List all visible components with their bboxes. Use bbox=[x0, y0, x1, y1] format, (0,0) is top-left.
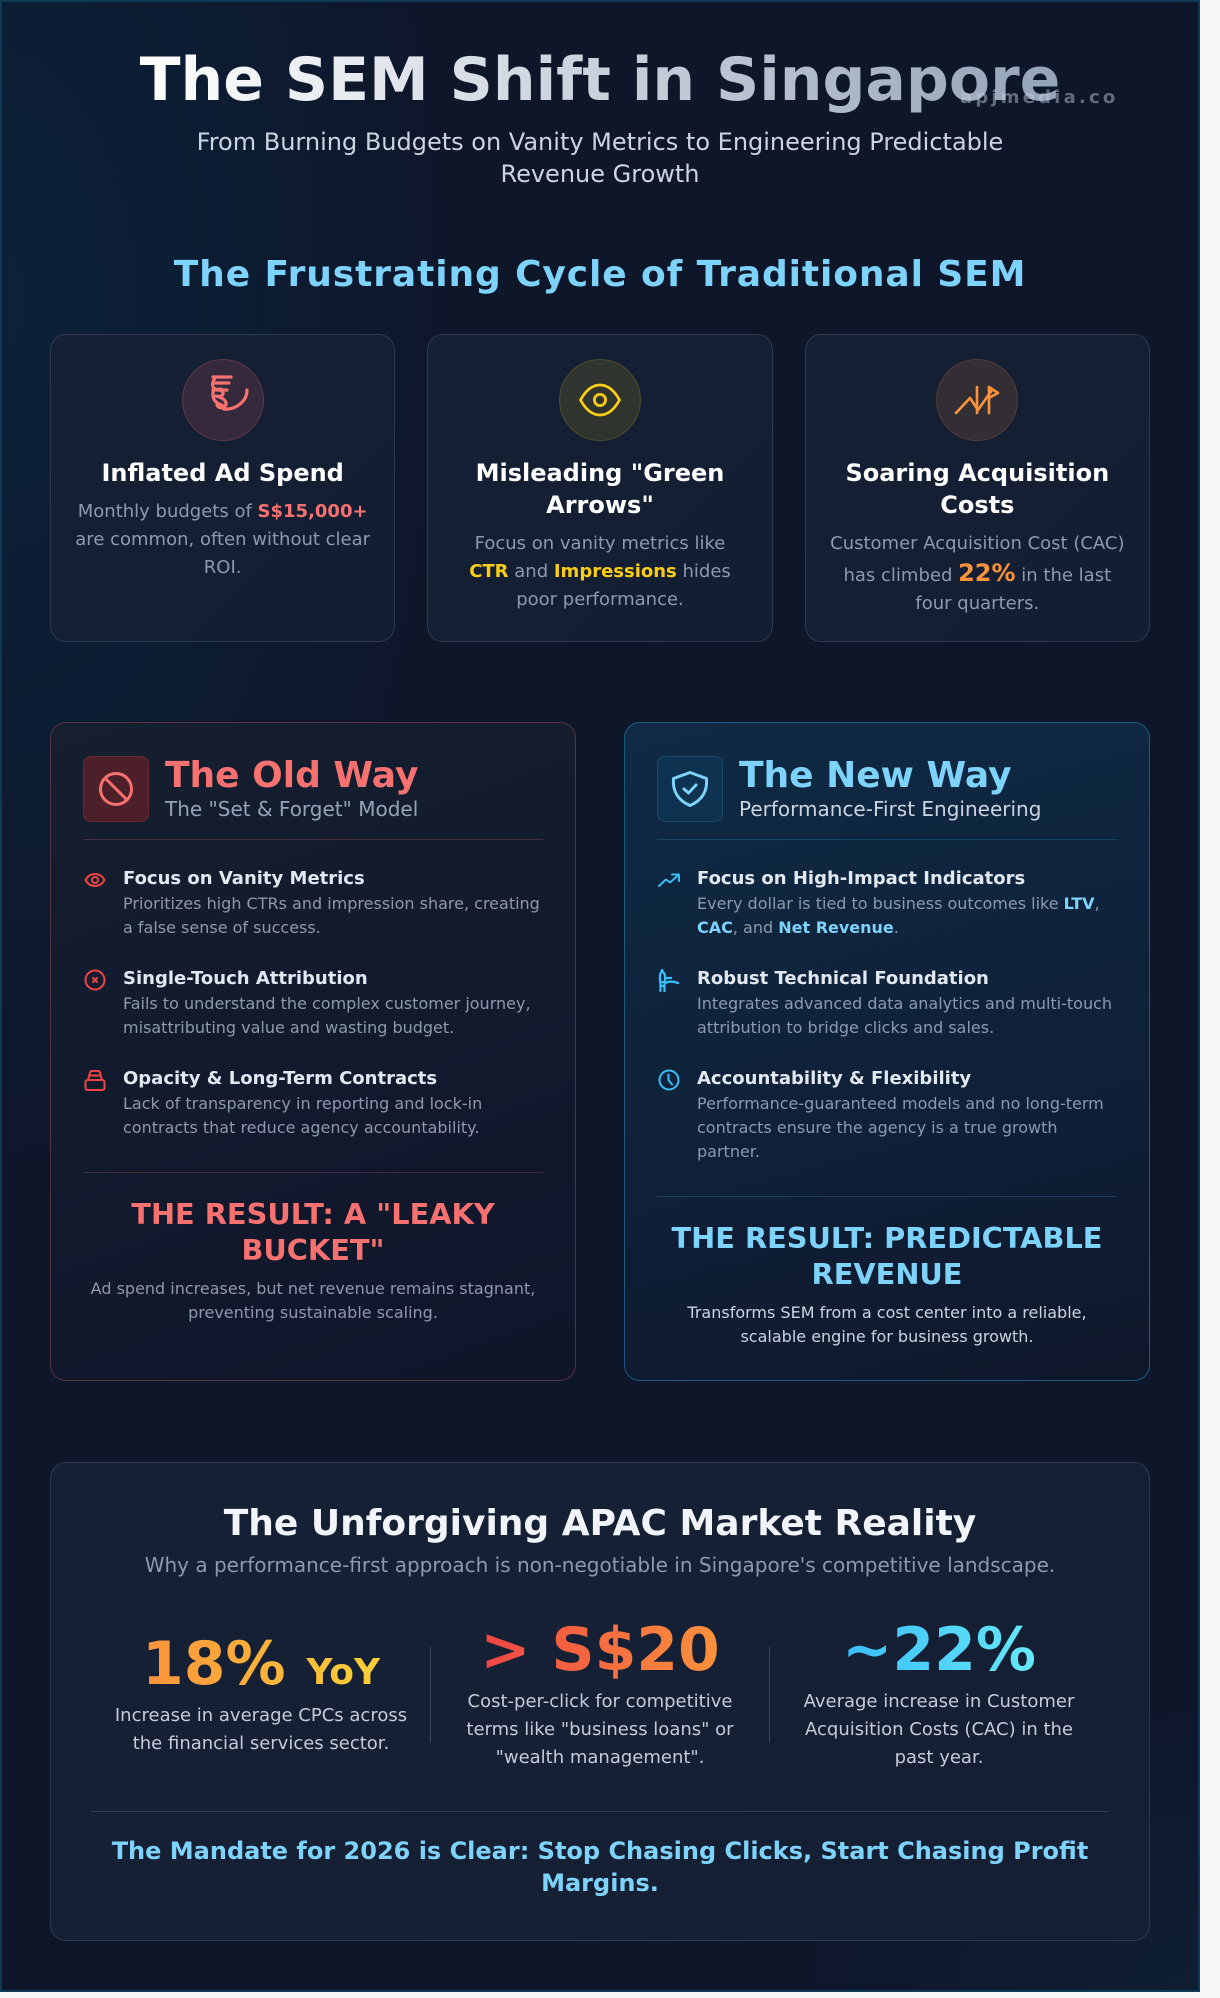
result heading bbox=[672, 1221, 1102, 1291]
card text: Focus on vanity metrics like bbox=[475, 532, 725, 554]
stat text: Increase in average CPCs across bbox=[115, 1704, 407, 1726]
result text: Ad spend increases, but net revenue remains stagnant, bbox=[91, 1278, 535, 1298]
card title: Misleading "Green bbox=[476, 459, 724, 487]
card text: four quarters. bbox=[915, 593, 1039, 614]
item: accountability bbox=[658, 1068, 1104, 1160]
item: opacity: Lack of transparency in reporting and lock-in bbox=[123, 1094, 482, 1112]
subtitle: From Burning Budgets on Vanity Metrics to Engineering Predictable bbox=[197, 128, 1003, 156]
stat number: 18% YoY bbox=[142, 1629, 380, 1699]
stat text bbox=[804, 1690, 1074, 1768]
stat text bbox=[466, 1690, 734, 1768]
icon: eye bbox=[559, 359, 641, 441]
card title: Soaring Acquisition bbox=[845, 459, 1109, 487]
item: high impact: CAC, and Net Revenue. bbox=[697, 918, 899, 936]
item: vanity metrics bbox=[84, 868, 540, 936]
item: high impact: Focus on High-Impact Indicators bbox=[697, 868, 1025, 889]
panel: APAC market reality bbox=[50, 1462, 1150, 1941]
subheading: Why a performance-first approach is non-negotiable in Singapore's competitive landscape. bbox=[145, 1553, 1055, 1577]
item: technical foundation: attribution to bridge clicks and sales. bbox=[697, 1018, 994, 1036]
stat: 18% YoY bbox=[115, 1629, 407, 1754]
item: accountability: contracts ensure the agency is a true growth bbox=[697, 1118, 1057, 1136]
card text bbox=[75, 500, 370, 578]
stat text: terms like "business loans" or bbox=[466, 1718, 734, 1740]
stat text: Cost-per-click for competitive bbox=[468, 1690, 732, 1712]
item: opacity: contracts that reduce agency accountability. bbox=[123, 1118, 479, 1136]
card title: Costs bbox=[940, 491, 1014, 519]
item: accountability: Performance-guaranteed models and no long-term bbox=[697, 1094, 1104, 1112]
panel subheading: Performance-First Engineering bbox=[739, 797, 1041, 821]
item: opacity: Opacity & Long-Term Contracts bbox=[123, 1068, 437, 1089]
item: vanity metrics: Focus on Vanity Metrics bbox=[123, 868, 365, 889]
panel: misleading green arrows bbox=[427, 334, 773, 642]
card title: Inflated Ad Spend bbox=[101, 459, 344, 487]
stat text: past year. bbox=[895, 1746, 983, 1768]
panel heading: The New Way bbox=[739, 754, 1012, 796]
item: vanity metrics: Prioritizes high CTRs and impression share, creating bbox=[123, 894, 540, 912]
watermark: apjmedia.co bbox=[960, 87, 1118, 108]
stat number: > S$20 bbox=[480, 1614, 720, 1684]
stat text bbox=[115, 1704, 407, 1754]
heading: frustrating cycle: The Frustrating Cycle of Traditional SEM bbox=[174, 254, 1026, 295]
icon: rupee bbox=[182, 359, 264, 441]
stat text: Acquisition Costs (CAC) in the bbox=[805, 1718, 1073, 1740]
card text: Customer Acquisition Cost (CAC) bbox=[830, 532, 1125, 554]
result text: preventing sustainable scaling. bbox=[188, 1302, 438, 1322]
panel: the old way bbox=[50, 722, 576, 1381]
subtitle: Revenue Growth bbox=[500, 160, 700, 188]
card text bbox=[469, 532, 731, 610]
title: The SEM Shift in Singapore bbox=[140, 44, 1060, 114]
item: high impact: Every dollar is tied to business outcomes like LTV, bbox=[697, 894, 1100, 912]
stat: 22% bbox=[804, 1614, 1074, 1768]
result text: scalable engine for business growth. bbox=[740, 1326, 1034, 1346]
icon: trend bbox=[936, 359, 1018, 441]
mandate statement: Margins. bbox=[541, 1869, 659, 1897]
stat text: "wealth management". bbox=[496, 1746, 704, 1768]
mandate statement bbox=[112, 1837, 1088, 1897]
result text bbox=[90, 1278, 535, 1322]
item: high impact bbox=[658, 868, 1100, 936]
panel: the new way bbox=[624, 722, 1150, 1381]
item: vanity metrics: a false sense of success. bbox=[123, 918, 321, 936]
card text: has climbed 22% in the last bbox=[843, 559, 1111, 587]
item: single touch: misattributing value and wasting budget. bbox=[123, 1018, 454, 1036]
item: technical foundation bbox=[658, 968, 1112, 1036]
card text: CTR and Impressions hides bbox=[469, 561, 731, 582]
item: single touch: Fails to understand the complex customer journey, bbox=[123, 994, 531, 1012]
card title bbox=[845, 459, 1109, 519]
icon: prohibited bbox=[83, 756, 149, 822]
result heading: REVENUE bbox=[812, 1257, 962, 1291]
result heading: THE RESULT: PREDICTABLE bbox=[672, 1221, 1102, 1255]
panel: soaring acquisition costs bbox=[805, 334, 1150, 642]
item: single touch: Single-Touch Attribution bbox=[123, 968, 368, 989]
item: technical foundation: Robust Technical Foundation bbox=[697, 968, 989, 989]
stat text: Average increase in Customer bbox=[804, 1690, 1074, 1712]
item: opacity bbox=[84, 1068, 482, 1136]
mandate statement: The Mandate for 2026 is Clear: Stop Chasing Clicks, Start Chasing Profit bbox=[112, 1837, 1088, 1865]
result text bbox=[687, 1302, 1087, 1346]
card text: are common, often without clear bbox=[75, 529, 370, 550]
card text bbox=[830, 532, 1125, 614]
icon: shield bbox=[657, 756, 723, 822]
result heading: BUCKET" bbox=[241, 1233, 385, 1267]
heading: The Unforgiving APAC Market Reality bbox=[224, 1503, 976, 1544]
panel subheading: The "Set & Forget" Model bbox=[165, 797, 418, 821]
item: accountability: Accountability & Flexibility bbox=[697, 1068, 971, 1089]
result heading bbox=[131, 1197, 495, 1267]
card title: Arrows" bbox=[546, 491, 654, 519]
result text: Transforms SEM from a cost center into a reliable, bbox=[687, 1302, 1087, 1322]
stat: S$20 bbox=[466, 1614, 734, 1768]
stat text: the financial services sector. bbox=[133, 1732, 389, 1754]
card text: Monthly budgets of S$15,000+ bbox=[78, 500, 368, 522]
card title bbox=[476, 459, 724, 519]
stat number: ~22% bbox=[842, 1614, 1036, 1684]
panel heading: The Old Way bbox=[165, 754, 418, 796]
card text: ROI. bbox=[204, 557, 242, 578]
subtitle bbox=[197, 128, 1003, 188]
panel: inflated ad spend bbox=[50, 334, 395, 642]
card text: poor performance. bbox=[516, 589, 684, 610]
panel: the new way: partner. bbox=[697, 1142, 760, 1160]
item: technical foundation: Integrates advanced data analytics and multi-touch bbox=[697, 994, 1112, 1012]
result heading: THE RESULT: A "LEAKY bbox=[131, 1197, 495, 1231]
item: single touch bbox=[84, 968, 531, 1036]
